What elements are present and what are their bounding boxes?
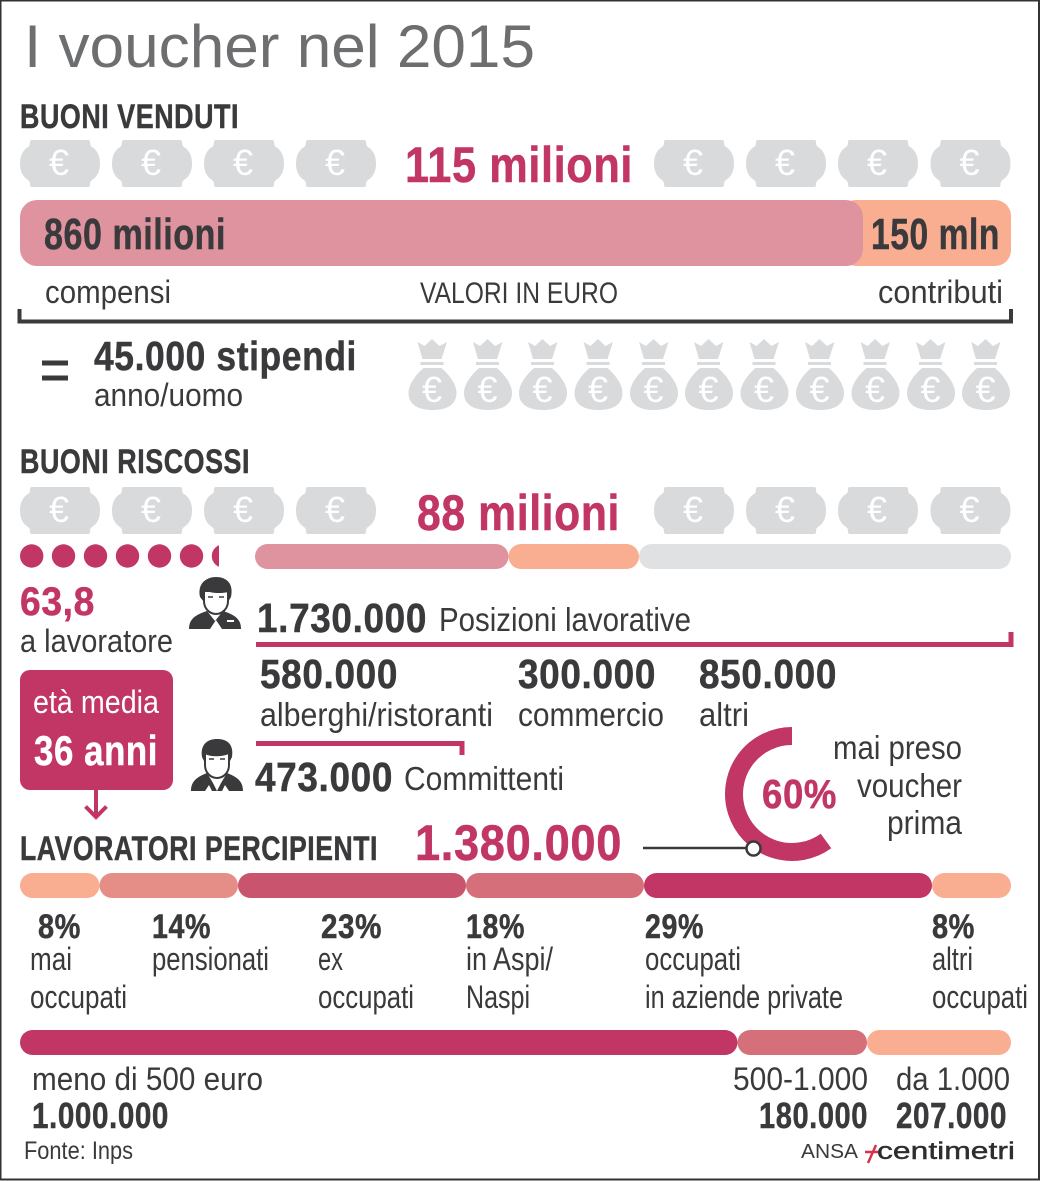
connector line (643, 847, 748, 849)
label: committenti: Committenti (404, 760, 564, 797)
connector marker (746, 842, 760, 856)
value: 88 milioni: 88 milioni (417, 485, 620, 541)
bar: contributi segment (840, 200, 1011, 266)
panel: buoni venduti (20, 98, 1011, 413)
stacked bar: categories (20, 873, 1011, 898)
category: mai occupati (30, 908, 127, 1015)
icons: money bags: € (698, 369, 719, 410)
band: 500-1.000: 180.000 (759, 1095, 868, 1136)
icon: employer (191, 739, 243, 791)
category: pensionati: pensionati (152, 941, 269, 977)
icons: tickets row (20, 140, 1010, 187)
category: pensionati: 14% (152, 908, 211, 946)
category: ex occupati: ex (318, 941, 343, 977)
icons: tickets row (20, 487, 1010, 534)
label: mai preso voucher prima: prima (887, 804, 963, 841)
label: contributi: contributi (878, 274, 1003, 310)
label: posizioni lavorative: Posizioni lavorative (439, 601, 691, 638)
line: committenti (256, 744, 462, 755)
chart: 60% ring (734, 736, 826, 852)
category: occupati in aziende private: occupati (645, 941, 741, 977)
label: a lavoratore: a lavoratore (20, 623, 173, 659)
category: occupati in aziende private (645, 908, 843, 1015)
label: altri: altri (699, 696, 749, 733)
icons: money bags: € (754, 369, 774, 410)
band: da 1.000 (896, 1061, 1010, 1136)
category: pensionati (152, 908, 269, 977)
value: 300.000: 300.000 (518, 651, 656, 697)
band: 500-1.000: 500-1.000 (733, 1061, 868, 1097)
label: commercio: commercio (518, 696, 664, 733)
stacked bar: income bands (20, 1030, 1011, 1055)
icons: money bags: € (532, 369, 553, 410)
value: 473.000: 473.000 (255, 754, 393, 800)
band: meno di 500 euro: 1.000.000 (32, 1095, 169, 1136)
label: mai preso voucher prima: mai preso (833, 729, 962, 766)
label: valori in euro: VALORI IN EURO (420, 277, 618, 310)
icons: money bags: € (920, 369, 941, 410)
icons: tickets row: € (683, 142, 703, 183)
category: altri occupati (932, 908, 1028, 1015)
logo: ANSA Centimetri (801, 1138, 1015, 1165)
icons: tickets row: € (141, 142, 161, 183)
icon: worker (189, 577, 241, 629)
band: 500-1.000 (733, 1061, 868, 1136)
icons: tickets row: € (325, 142, 345, 183)
icons: money bags: € (865, 369, 885, 410)
category: ex occupati (318, 908, 414, 1015)
stacked bar: riscossi (255, 544, 1011, 569)
label: mai preso voucher prima (833, 729, 963, 841)
icons: money bags: € (975, 369, 996, 410)
category: mai occupati: 8% (38, 908, 81, 946)
value: 150 mln: 150 mln (871, 210, 1000, 259)
label: mai preso voucher prima: voucher (857, 767, 962, 804)
icons: tickets row: € (867, 489, 887, 530)
source: Fonte: Inps (24, 1137, 133, 1165)
icons: tickets row: € (959, 142, 980, 183)
band: da 1.000: 207.000 (896, 1095, 1007, 1136)
icons: dots (20, 544, 219, 568)
value: 63,8: 63,8 (20, 580, 95, 624)
title: I voucher nel 2015 (24, 13, 535, 80)
callout: età media: 36 anni (34, 727, 158, 774)
category: mai occupati: mai (30, 941, 72, 977)
band: meno di 500 euro: meno di 500 euro (32, 1061, 263, 1097)
category: in Aspi/Naspi: Naspi (466, 979, 530, 1015)
logo: ANSA Centimetri: centimetri (877, 1138, 1015, 1165)
value: 115 milioni: 115 milioni (405, 137, 633, 193)
label: alberghi/ristoranti: alberghi/ristoranti (260, 696, 493, 733)
icons: tickets row: € (49, 142, 69, 183)
value: 860 milioni: 860 milioni (44, 210, 226, 259)
value: 45.000 stipendi: 45.000 stipendi (94, 333, 357, 379)
icons: money bags: € (643, 369, 664, 410)
icons: tickets row: € (775, 489, 795, 530)
category: in Aspi/Naspi (466, 908, 553, 1015)
icons: tickets row: € (775, 142, 795, 183)
category: ex occupati: 23% (321, 908, 382, 946)
value: 1.380.000: 1.380.000 (415, 815, 622, 871)
band: meno di 500 euro (32, 1061, 263, 1136)
logo: ANSA Centimetri: ANSA (801, 1141, 859, 1163)
icons: tickets row: € (959, 489, 980, 530)
icons: money bags (408, 339, 1010, 410)
panel: buoni riscossi (20, 443, 1011, 852)
value: 60%: 60% (762, 771, 837, 817)
panel: lavoratori percipienti (20, 815, 1028, 1136)
label: anno/uomo: anno/uomo (94, 377, 243, 413)
icons: tickets row: € (683, 489, 703, 530)
bar: compensi segment (20, 200, 863, 266)
arrow (86, 790, 106, 817)
icons: tickets row: € (49, 489, 69, 530)
icons: tickets row: € (233, 489, 253, 530)
line: posizioni (256, 632, 1011, 644)
icons: tickets row: € (141, 489, 161, 530)
equals sign (42, 363, 68, 378)
icons: money bags: € (422, 369, 442, 410)
band: da 1.000: da 1.000 (896, 1061, 1010, 1097)
heading: buoni venduti: BUONI VENDUTI (20, 98, 239, 136)
value: 580.000: 580.000 (260, 651, 398, 697)
category: occupati in aziende private: 29% (645, 908, 704, 946)
heading: buoni riscossi: BUONI RISCOSSI (20, 443, 250, 481)
label: compensi: compensi (45, 274, 171, 310)
category: ex occupati: occupati (318, 979, 414, 1015)
icons: money bags: € (477, 369, 498, 410)
icons: tickets row: € (867, 142, 887, 183)
heading: lavoratori percipienti: LAVORATORI PERCIPIENTI (20, 830, 378, 868)
category: altri occupati: altri (932, 941, 973, 977)
callout: età media (20, 670, 173, 790)
value: 850.000: 850.000 (699, 651, 837, 697)
category: mai occupati: occupati (30, 979, 127, 1015)
category: occupati in aziende private: in aziende private (645, 979, 843, 1015)
value: 1.730.000: 1.730.000 (257, 595, 427, 641)
icons: tickets row: € (233, 142, 253, 183)
callout: età media: età media (33, 684, 159, 720)
category: altri occupati: 8% (932, 908, 975, 946)
bracket (20, 309, 1011, 322)
icons: money bags: € (588, 369, 608, 410)
icons: tickets row: € (325, 489, 345, 530)
icons: money bags: € (809, 369, 830, 410)
category: in Aspi/Naspi: in Aspi/ (466, 941, 553, 977)
category: in Aspi/Naspi: 18% (466, 908, 525, 946)
